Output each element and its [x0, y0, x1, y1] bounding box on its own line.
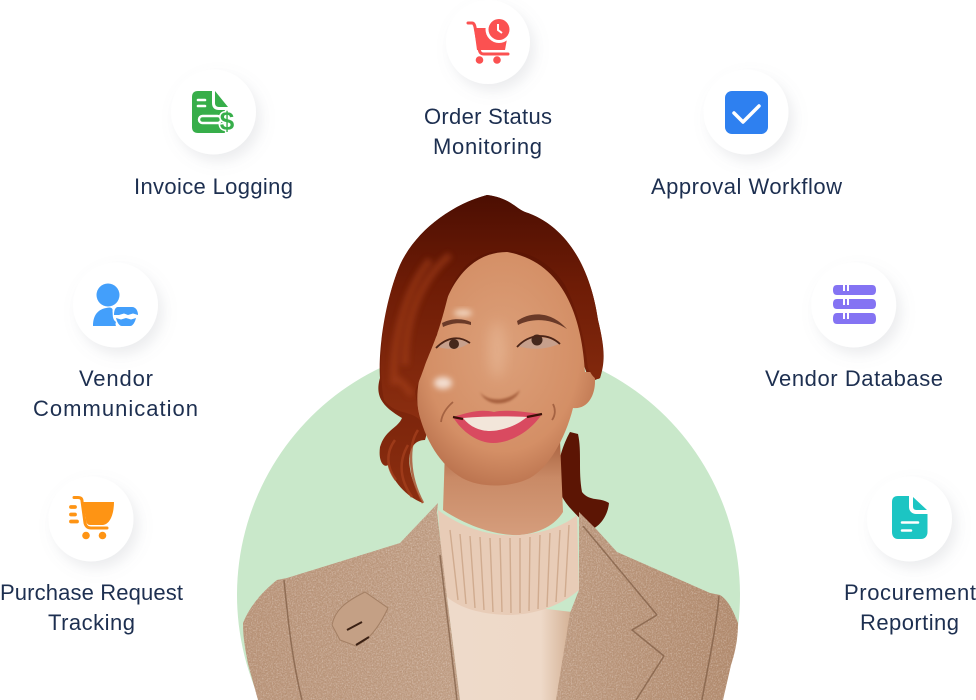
label	[33, 366, 198, 421]
neck	[443, 440, 563, 535]
icon: green invoice with dollar: $	[220, 106, 235, 136]
icon badge	[704, 70, 788, 154]
highlights in hair	[394, 255, 450, 395]
icon: teal document	[892, 496, 928, 539]
label: Tracking	[48, 610, 135, 635]
icon: orange fast cart	[71, 498, 114, 539]
blazer	[240, 500, 740, 700]
icon badge	[446, 0, 530, 84]
nose	[480, 390, 520, 404]
sweater	[438, 510, 579, 700]
icon: green invoice with dollar	[192, 91, 235, 136]
front hair	[381, 195, 603, 420]
label: Vendor	[79, 366, 153, 391]
eyes and brows	[436, 314, 567, 349]
label	[844, 580, 976, 635]
icon badge	[48, 476, 134, 562]
icon: blue person with storefront	[93, 284, 138, 326]
label: Monitoring	[433, 134, 542, 159]
smile lines	[441, 402, 555, 422]
item: purchase request tracking	[0, 476, 183, 635]
label: Approval Workflow	[651, 174, 842, 199]
background circle	[237, 343, 740, 700]
item: vendor database	[765, 262, 943, 391]
face	[417, 252, 595, 486]
item: vendor communication	[33, 262, 198, 421]
item: order status monitoring	[424, 0, 552, 159]
item: approval workflow	[651, 70, 842, 199]
back hair and ponytail	[378, 195, 609, 530]
icon: purple database rows	[833, 285, 876, 324]
mouth	[453, 411, 542, 443]
item: invoice logging	[134, 70, 293, 199]
cheek and forehead highlights	[434, 377, 452, 389]
label: Purchase Request	[0, 580, 183, 605]
label: Order Status	[424, 104, 552, 129]
label: Invoice Logging	[134, 174, 293, 199]
icon badge	[171, 70, 256, 154]
label: Communication	[33, 396, 198, 421]
label	[424, 104, 552, 159]
icon: red shopping cart with clock	[468, 16, 512, 64]
label: Reporting	[860, 610, 959, 635]
icon: blue checkbox	[725, 91, 768, 134]
label	[0, 580, 183, 635]
label: Procurement	[844, 580, 976, 605]
portrait: woman in tan blazer	[240, 195, 740, 700]
item: procurement reporting	[844, 476, 976, 635]
label: Vendor Database	[765, 366, 943, 391]
icon badge	[811, 262, 896, 348]
icon badge	[867, 476, 952, 562]
icon badge	[73, 262, 158, 348]
